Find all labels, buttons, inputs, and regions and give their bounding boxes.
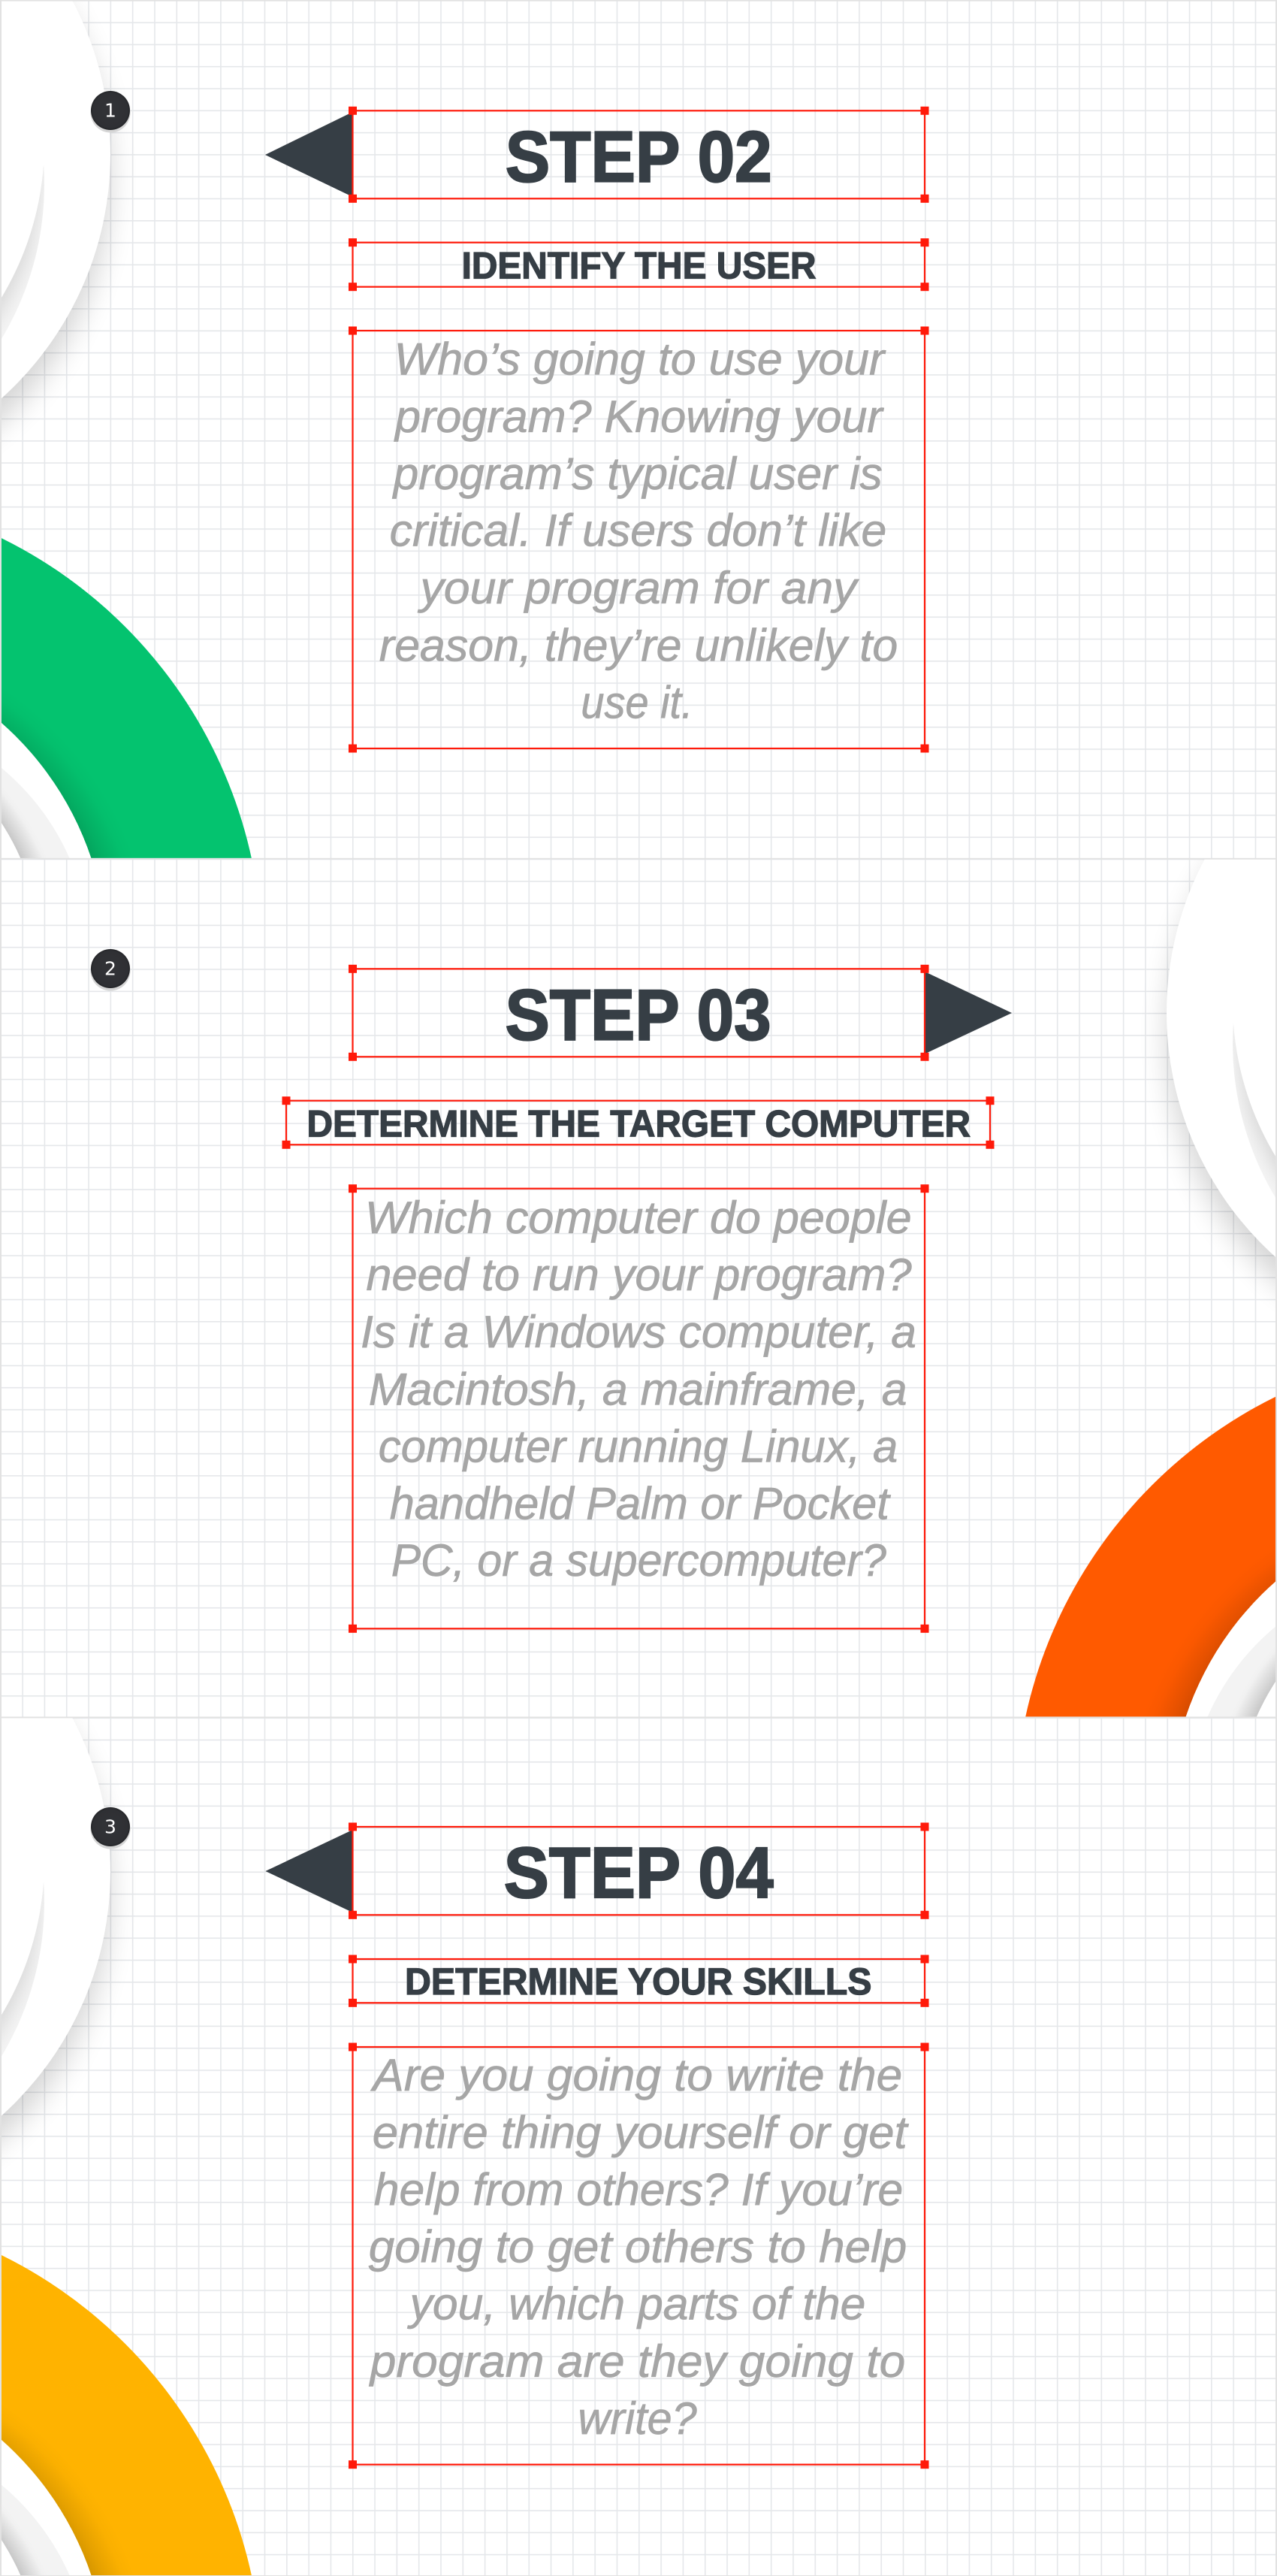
box: step 03 heading: STEP 03 <box>505 975 771 1055</box>
box: step 03 body text: PC, or a supercomputer? <box>391 1535 886 1586</box>
box: step 03 body text: need to run your program? <box>366 1250 912 1300</box>
badge: number 2: 2 <box>104 957 116 980</box>
box: step 03 body text: computer running Linux, a <box>379 1422 898 1471</box>
box: step 02 body text: program’s typical user is <box>392 449 883 499</box>
box: step 03 body text: Macintosh, a mainframe, a <box>369 1365 907 1415</box>
box: step 02 body text: your program for any <box>417 563 860 613</box>
box: step 04 body text: write? <box>578 2393 697 2444</box>
box: step 04 body text: help from others? If you’re <box>374 2165 903 2215</box>
arrow: step 03 <box>924 972 1012 1054</box>
box: step 04 body text: program are they going to <box>369 2336 905 2387</box>
box: step 02 subheading <box>349 238 928 291</box>
badge: number 3: 3 <box>104 1816 116 1838</box>
badge: number 3 <box>90 1807 131 1849</box>
panel: slide 2 rings <box>1025 860 1275 1716</box>
badge: number 1: 1 <box>104 99 116 122</box>
box: step 02 heading <box>349 107 928 203</box>
arrow: step 04 <box>265 1830 353 1912</box>
badge: number 1 <box>90 91 131 132</box>
box: step 02 body text: Who’s going to use your <box>394 334 886 384</box>
box: step 03 body text: Is it a Windows computer, a <box>361 1307 916 1357</box>
box: step 03 body text <box>349 1184 928 1633</box>
box: step 03 heading <box>349 965 928 1061</box>
box: step 04 heading: STEP 04 <box>504 1833 774 1913</box>
box: step 03 body text: handheld Palm or Pocket <box>390 1478 891 1528</box>
box: step 03 subheading: DETERMINE THE TARGET COMPUTER <box>306 1103 971 1145</box>
panel: slide 3 rings <box>2 1718 252 2575</box>
box: step 04 body text: entire thing yourself or get <box>373 2108 909 2158</box>
box: step 04 body text <box>349 2042 928 2469</box>
box: step 04 heading <box>349 1823 928 1919</box>
arrow: step 02 <box>265 112 353 197</box>
box: step 02 body text <box>349 326 928 753</box>
box: step 02 body text: reason, they’re unlikely to <box>379 621 898 670</box>
panel: slide 1 rings <box>0 0 252 859</box>
box: step 04 subheading <box>349 1955 928 2007</box>
box: step 02 body text: critical. If users don’t like <box>390 506 886 556</box>
box: step 02 subheading: IDENTIFY THE USER <box>462 245 817 287</box>
box: step 02 body text: use it. <box>581 677 693 727</box>
box: step 02 heading: STEP 02 <box>506 117 772 197</box>
box: step 03 body text: Which computer do people <box>365 1193 912 1243</box>
box: step 04 body text: Are you going to write the <box>370 2050 902 2100</box>
box: step 04 body text: going to get others to help <box>369 2221 907 2272</box>
box: step 02 body text: program? Knowing your <box>394 392 884 442</box>
box: step 04 body text: you, which parts of the <box>407 2279 865 2330</box>
box: step 04 subheading: DETERMINE YOUR SKILLS <box>405 1961 871 2003</box>
badge: number 2 <box>90 949 131 990</box>
